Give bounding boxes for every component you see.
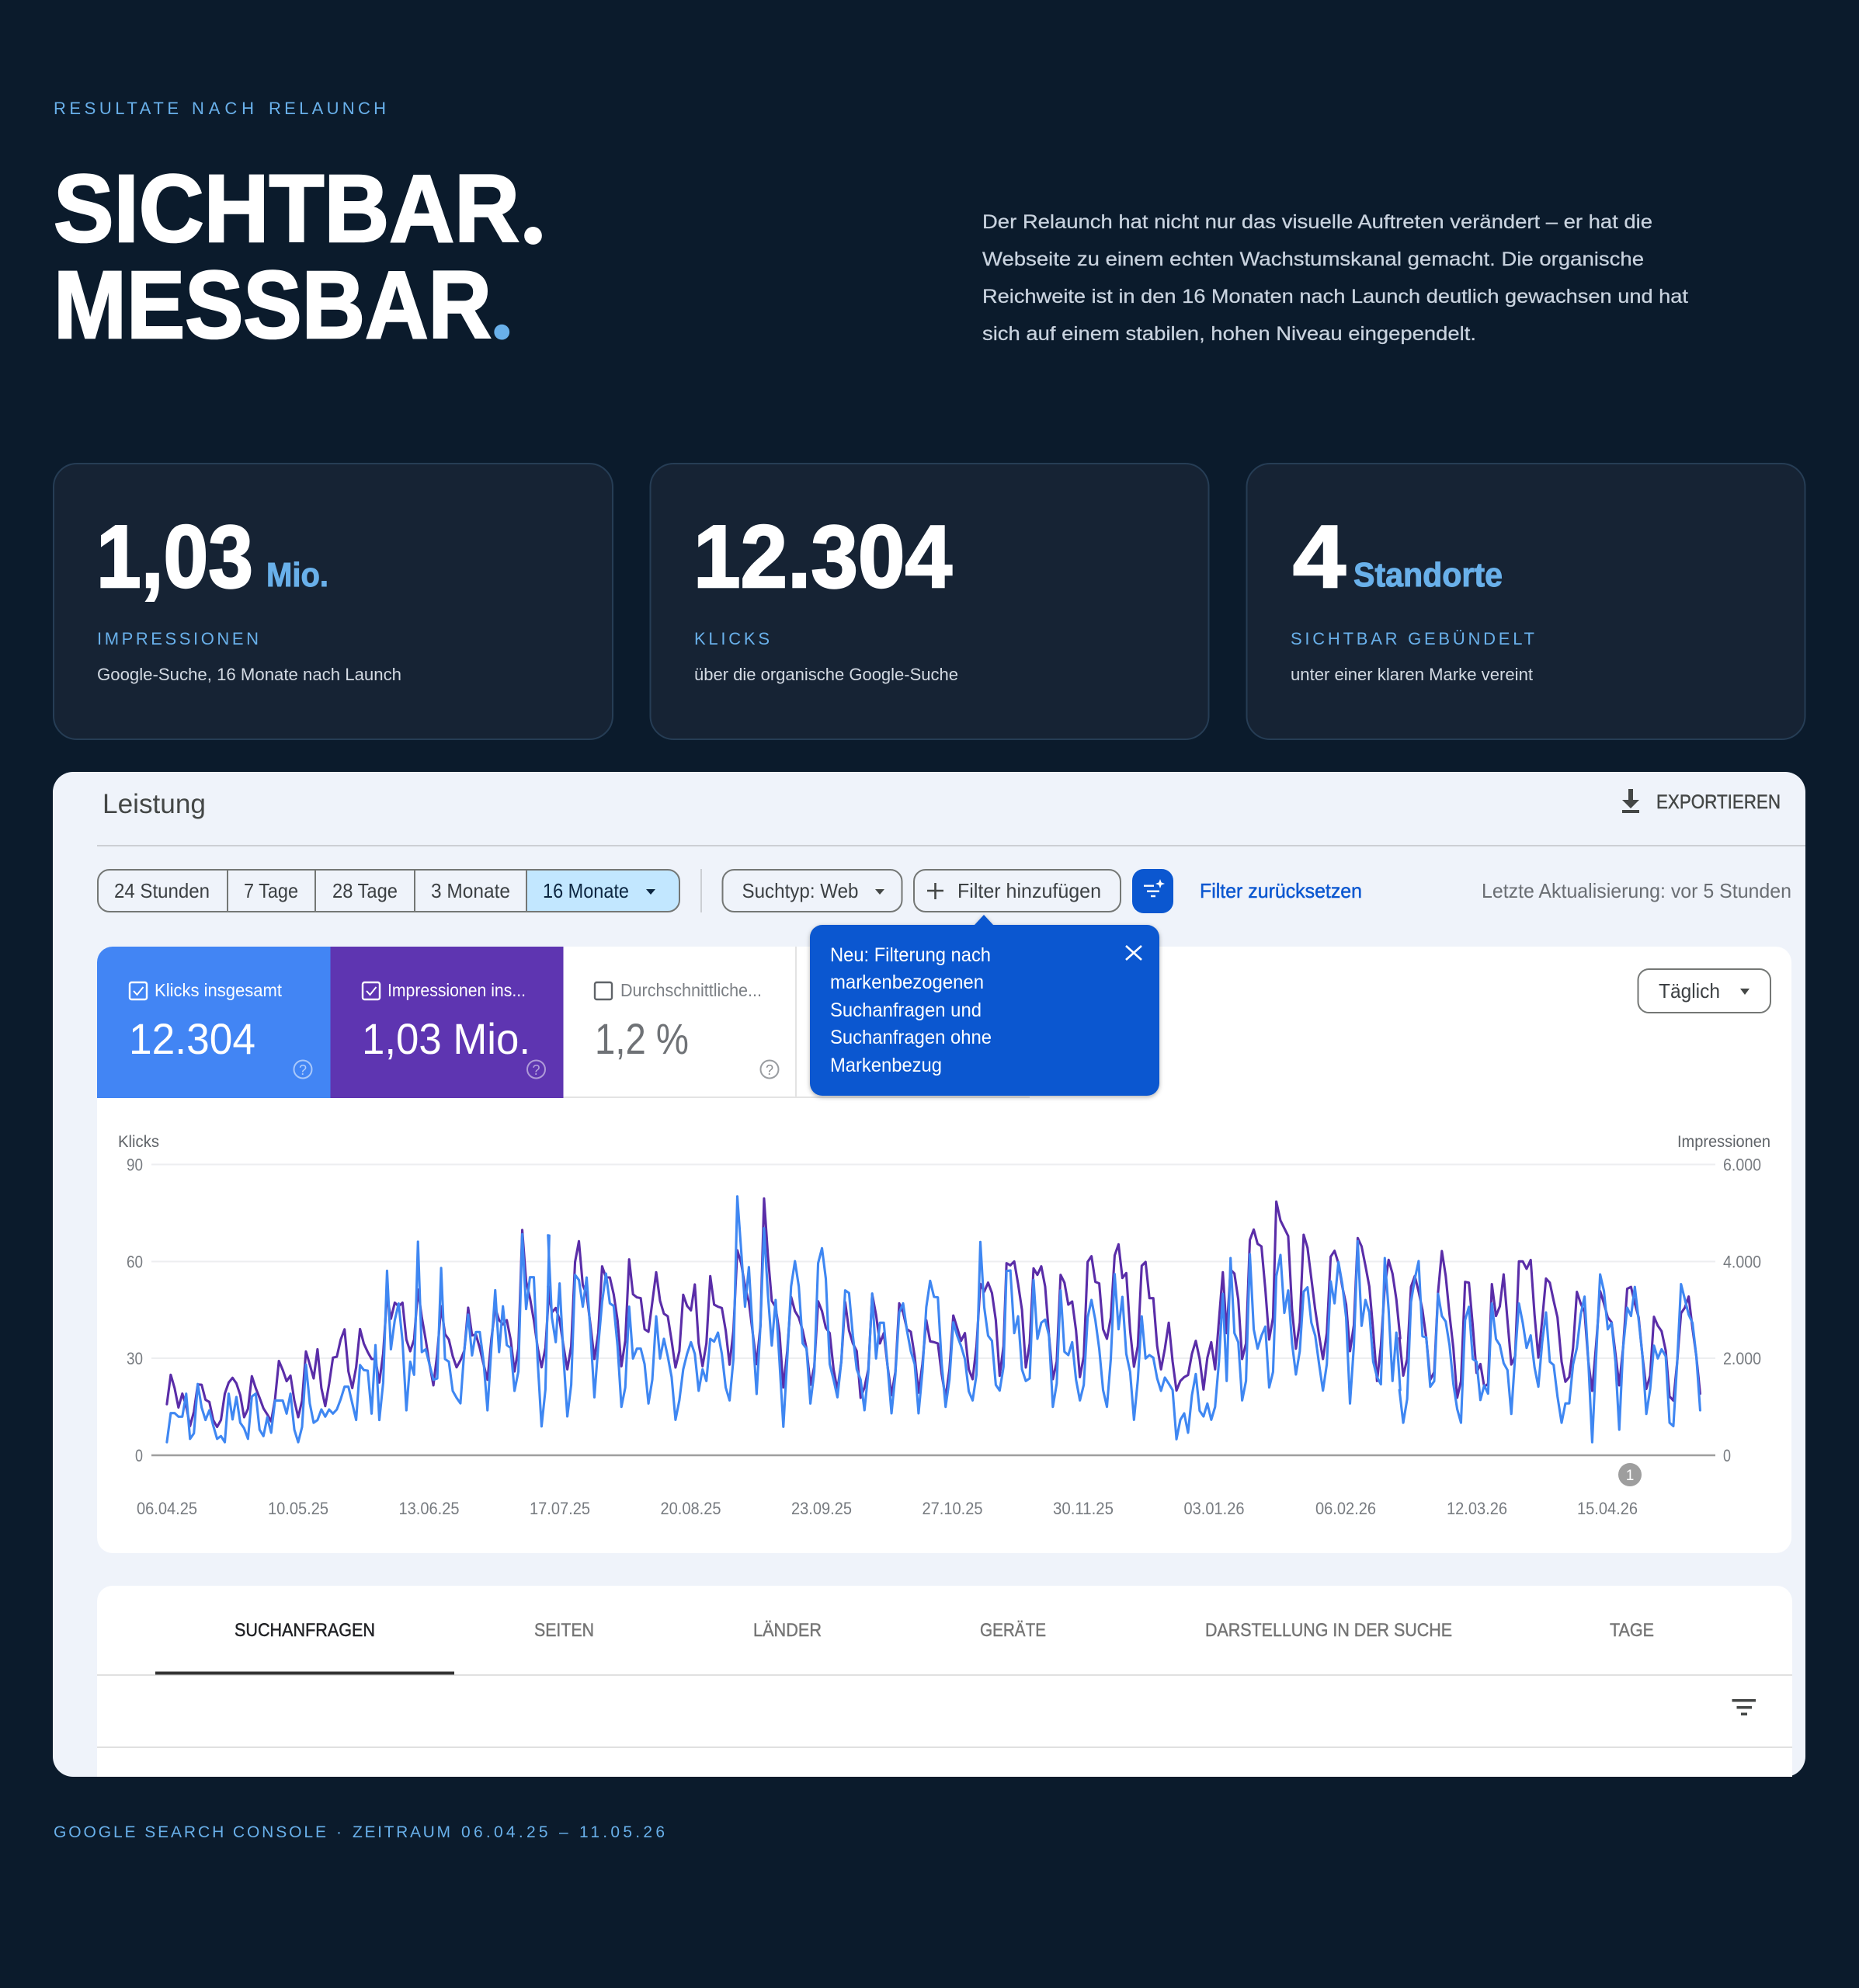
metric tile: average CTR: 1,2 % [595, 1014, 689, 1063]
intro text block: Reichweite ist in den 16 Monaten nach Launch deutlich gewachsen und hat [982, 286, 1688, 308]
filter: Suchtyp Web: Suchtyp: Web [742, 879, 859, 902]
eyebrow: Resultate nach Relaunch: RELAUNCH [269, 99, 386, 118]
left axis: clicks scale: 90 [127, 1156, 143, 1174]
eyebrow: Resultate nach Relaunch: NACH [192, 99, 254, 118]
right axis: impressions scale: 6.000 [1723, 1156, 1761, 1174]
button: add filter: Filter hinzufügen [957, 879, 1101, 902]
eyebrow: Resultate nach Relaunch [54, 99, 386, 118]
left axis: clicks scale: 0 [135, 1446, 143, 1465]
link: reset filter: Filter zurücksetzen [1200, 879, 1362, 902]
dropdown: Täglich [1638, 969, 1770, 1013]
footer source line: ZEITRAUM [353, 1823, 450, 1841]
metric tile: total impressions: 1,03 Mio. [362, 1014, 530, 1063]
date range segmented control: 7 Tage [244, 879, 298, 902]
filter: Suchtyp Web [722, 870, 902, 912]
eyebrow: Resultate nach Relaunch: RESULTATE [54, 99, 179, 118]
callout: new filter tooltip: Neu: Filterung nach [830, 944, 991, 966]
title: . [490, 255, 514, 360]
metric tile: total clicks: Klicks insgesamt [155, 980, 283, 1000]
axis titles: Impressionen [1677, 1133, 1770, 1151]
metric tile: total impressions: ? [532, 1062, 540, 1078]
number: 12.304: 12.304 [693, 508, 952, 606]
metric tile: average CTR [595, 980, 778, 1078]
tabs: SEITEN [534, 1620, 594, 1641]
caption: unter einer klaren Marke vereint [1291, 665, 1533, 684]
metric tile: total impressions: Impressionen ins... [387, 980, 526, 1000]
title: . [519, 144, 547, 267]
date axis: 30.11.25 [1053, 1499, 1114, 1518]
tabs [235, 1620, 1654, 1641]
intro text block [982, 211, 1688, 345]
button: add filter [914, 870, 1121, 912]
axis titles: Klicks [118, 1133, 159, 1151]
title: SICHTBAR [54, 156, 519, 262]
intro text block: Webseite zu einem echten Wachstumskanal gemacht. Die organische [982, 248, 1644, 270]
tabs: TAGE [1610, 1620, 1654, 1641]
right axis: impressions scale [1723, 1156, 1761, 1465]
metric tile: total clicks [97, 947, 331, 1098]
footer source line: 06.04.25 – 11.05.26 [461, 1823, 665, 1841]
callout: new filter tooltip: markenbezogenen [830, 971, 984, 993]
number: 1,03: 1,03 [96, 508, 253, 606]
date axis: 27.10.25 [923, 1499, 983, 1518]
date range segmented control: 16 Monate [543, 879, 629, 902]
caption: über die organische Google-Suche [694, 665, 958, 684]
metric tile: total impressions [331, 947, 564, 1098]
date axis: 23.09.25 [791, 1499, 852, 1518]
panel: stat card impressions [54, 464, 613, 739]
line chart: clicks and impressions [118, 1133, 1770, 1518]
caption: Google-Suche, 16 Monate nach Launch [97, 665, 401, 684]
annotation marker [1618, 1463, 1642, 1486]
intro text block: Der Relaunch hat nicht nur das visuelle Auftreten verändert – er hat die [982, 211, 1652, 233]
footer source line: · [336, 1823, 342, 1841]
date range segmented control: 3 Monate [431, 879, 510, 902]
label: Exportieren: EXPORTIEREN [1656, 791, 1781, 813]
label: Impressionen: IMPRESSIONEN [97, 629, 259, 648]
title: MESSBAR [54, 252, 492, 359]
icon: download [1622, 789, 1639, 813]
date axis: 06.02.26 [1315, 1499, 1376, 1518]
icon: table filter [1732, 1699, 1756, 1715]
date axis: 03.01.26 [1183, 1499, 1244, 1518]
footer source line: GOOGLE SEARCH CONSOLE [54, 1823, 326, 1841]
intro text block: sich auf einem stabilen, hohen Niveau eingependelt. [982, 323, 1476, 345]
callout: new filter tooltip: Markenbezug [830, 1055, 942, 1076]
panel: performance chart card [97, 915, 1791, 1553]
active tab underline [155, 1671, 454, 1674]
series: impressions (purple) [167, 1198, 1700, 1427]
date axis: 10.05.25 [268, 1499, 328, 1518]
date axis [137, 1499, 1638, 1518]
date axis: 13.06.25 [399, 1499, 460, 1518]
tabs: SUCHANFRAGEN [235, 1620, 375, 1641]
date axis: 17.07.25 [530, 1499, 590, 1518]
panel: search console screenshot [53, 772, 1805, 1777]
date axis: 20.08.25 [660, 1499, 721, 1518]
left axis: clicks scale: 60 [127, 1252, 143, 1272]
annotation marker: 1 [1626, 1468, 1634, 1484]
label: Klicks: KLICKS [694, 629, 770, 648]
dropdown: Täglich: Täglich [1659, 979, 1720, 1003]
title [54, 144, 547, 360]
axis titles [118, 1133, 1770, 1151]
callout: new filter tooltip: Suchanfragen und [830, 999, 982, 1021]
unit: Standorte: Standorte [1353, 556, 1503, 594]
date axis: 12.03.26 [1447, 1499, 1507, 1518]
left axis: clicks scale [127, 1156, 143, 1465]
label: Sichtbar gebündelt: SICHTBAR GEBÜNDELT [1291, 629, 1534, 648]
tabs: LÄNDER [753, 1620, 822, 1641]
date axis: 15.04.26 [1577, 1499, 1638, 1518]
callout: new filter tooltip [810, 915, 1159, 1096]
footer source line [54, 1823, 665, 1841]
right axis: impressions scale: 2.000 [1723, 1349, 1761, 1368]
date range segmented control: 28 Tage [332, 879, 398, 902]
panel: stat card locations [1247, 464, 1805, 739]
metric tile: total clicks: 12.304 [129, 1014, 255, 1063]
callout: new filter tooltip: Suchanfragen ohne [830, 1027, 992, 1048]
panel: dimension table [97, 1586, 1792, 1777]
series: clicks (blue) [167, 1197, 1700, 1442]
heading: Leistung: Leistung [103, 789, 206, 819]
number: 4: 4 [1293, 508, 1346, 606]
unit: Mio.: Mio. [266, 556, 328, 594]
metric tile: average CTR: ? [766, 1062, 773, 1078]
right axis: impressions scale: 4.000 [1723, 1252, 1761, 1272]
date range segmented control [98, 870, 680, 912]
icon: close [1126, 946, 1141, 960]
panel: stat card clicks [651, 464, 1208, 739]
date range segmented control: 24 Stunden [114, 879, 210, 902]
icon button: smart filter [1132, 869, 1173, 913]
tabs: GERÄTE [980, 1620, 1046, 1641]
tabs: DARSTELLUNG IN DER SUCHE [1205, 1620, 1452, 1641]
date axis: 06.04.25 [137, 1499, 197, 1518]
last update note: Letzte Aktualisierung: vor 5 Stunden [1482, 879, 1791, 902]
right axis: impressions scale: 0 [1723, 1446, 1731, 1465]
metric tile: total clicks: ? [299, 1062, 307, 1078]
export action [1622, 789, 1781, 813]
left axis: clicks scale: 30 [127, 1349, 143, 1368]
metric tile: average CTR: Durchschnittliche... [620, 980, 762, 1000]
